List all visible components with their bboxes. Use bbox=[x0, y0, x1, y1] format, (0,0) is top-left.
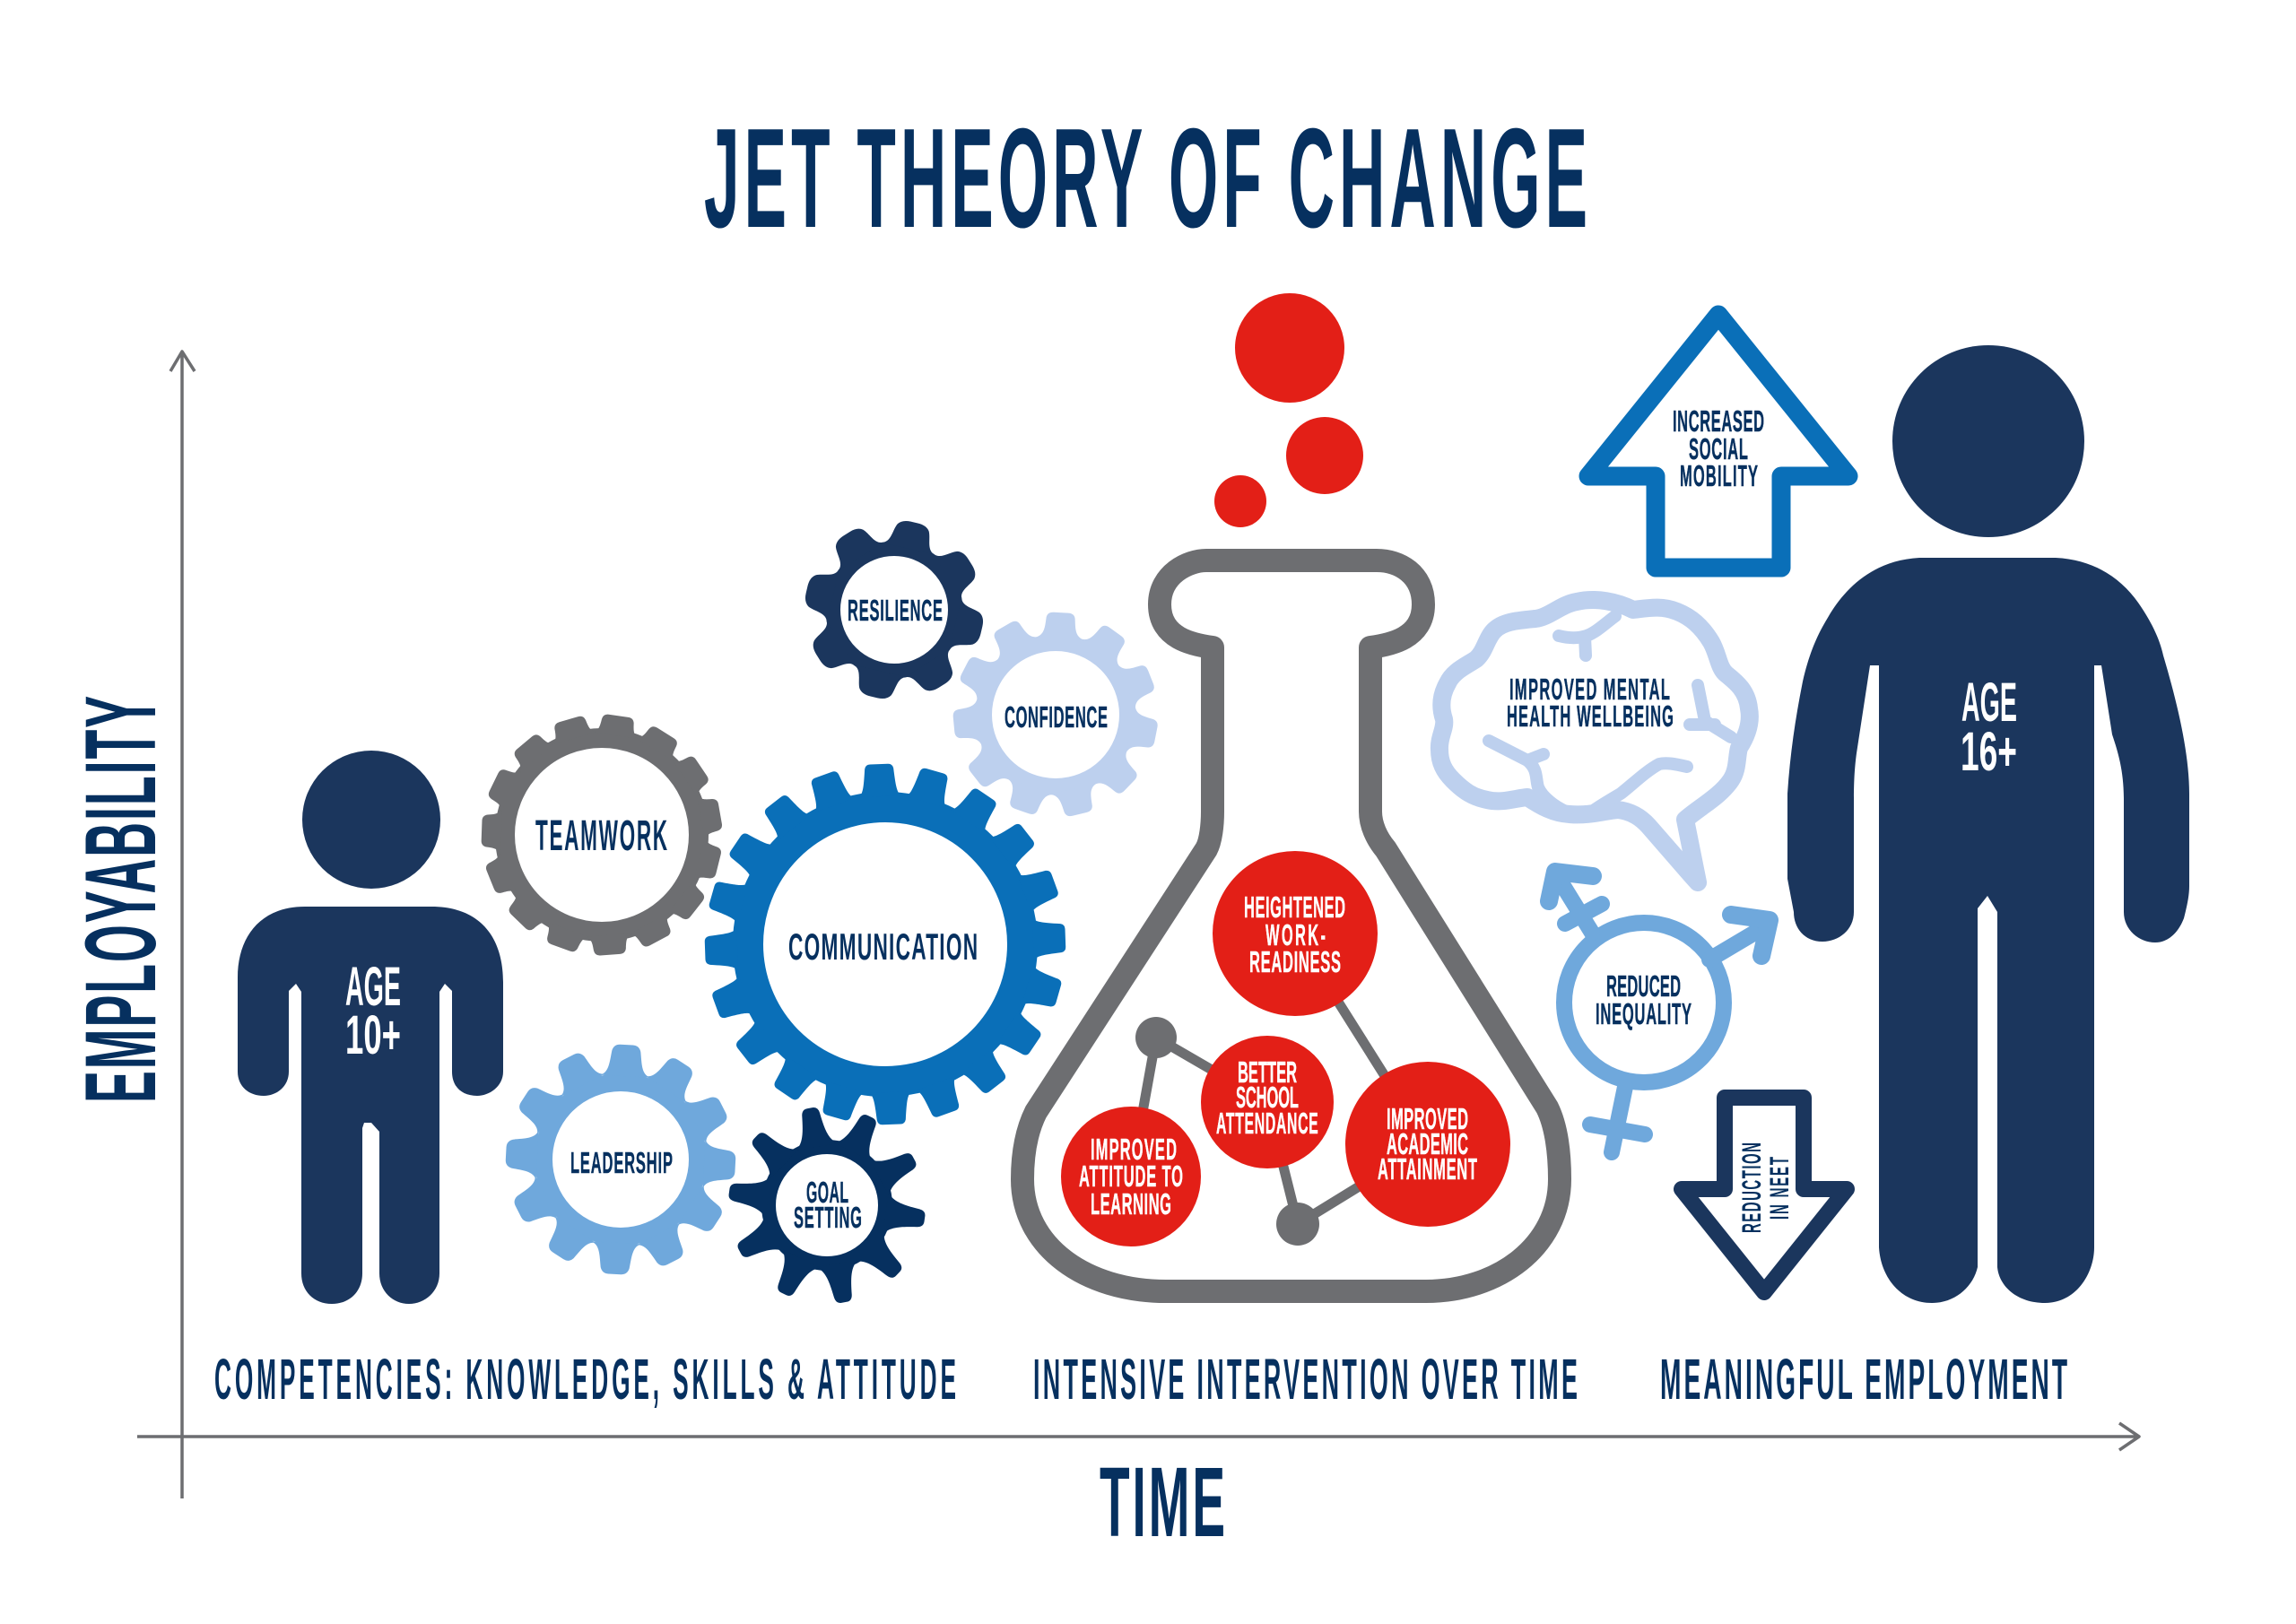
gear: goal setting: SETTING bbox=[794, 1201, 862, 1235]
circle: improved academic attainment: ACADEMIC bbox=[1387, 1127, 1468, 1161]
circle: better school attendance bbox=[1201, 1036, 1334, 1168]
circle: improved attitude to learning: LEARNING bbox=[1091, 1187, 1171, 1221]
gear: confidence: CONFIDENCE bbox=[1004, 700, 1108, 734]
circle: better school attendance: ATTENDANCE bbox=[1216, 1108, 1318, 1141]
figure: adult age 16+: 16+ bbox=[1961, 721, 2017, 782]
gender symbol: reduced inequality bbox=[1549, 872, 1770, 1152]
caption: employment: MEANINGFUL EMPLOYMENT bbox=[1660, 1348, 2067, 1411]
gear: communication bbox=[704, 763, 1066, 1125]
circle: heightened work-readiness: HEIGHTENED bbox=[1244, 890, 1345, 925]
circle: better school attendance: BETTER bbox=[1238, 1055, 1297, 1090]
circle: heightened work-readiness bbox=[1213, 851, 1378, 1016]
circle: improved attitude to learning: ATTITUDE TO bbox=[1079, 1159, 1183, 1194]
figure: child age 10+ bbox=[238, 751, 503, 1304]
gear: leadership: LEADERSHIP bbox=[570, 1146, 673, 1180]
title: JET THEORY OF CHANGE bbox=[704, 99, 1587, 257]
gear: resilience bbox=[801, 517, 987, 703]
gear: resilience: RESILIENCE bbox=[848, 594, 943, 628]
arrow: reduction in NEET: IN NEET bbox=[1766, 1157, 1796, 1220]
gear: goal setting bbox=[726, 1105, 927, 1306]
figure: adult age 16+: AGE bbox=[1961, 672, 2017, 733]
horizontal axis arrow bbox=[137, 1423, 2139, 1450]
circle: improved attitude to learning: IMPROVED bbox=[1091, 1133, 1177, 1167]
arrow: increased social mobility bbox=[1588, 315, 1848, 568]
arrow: increased social mobility: INCREASED bbox=[1673, 404, 1764, 439]
arrow: reduction in NEET bbox=[1682, 1098, 1847, 1292]
figure: child age 10+: AGE bbox=[345, 956, 401, 1017]
circle: improved academic attainment: ATTAINMENT bbox=[1378, 1152, 1477, 1186]
circle: improved academic attainment: IMPROVED bbox=[1387, 1102, 1468, 1136]
vertical axis arrow bbox=[170, 352, 195, 1498]
gender symbol: reduced inequality: INEQUALITY bbox=[1596, 997, 1692, 1031]
gender symbol: reduced inequality: REDUCED bbox=[1606, 969, 1681, 1003]
gear: goal setting: GOAL bbox=[806, 1177, 848, 1210]
caption: intervention: INTENSIVE INTERVENTION OVER TIME bbox=[1033, 1349, 1578, 1411]
gear: teamwork bbox=[481, 713, 724, 956]
bubbles above flask bbox=[1214, 293, 1363, 527]
figure: child age 10+: 10+ bbox=[345, 1004, 401, 1065]
circle: better school attendance: SCHOOL bbox=[1236, 1081, 1299, 1115]
arrow: reduction in NEET: REDUCTION bbox=[1738, 1142, 1768, 1233]
arrow: increased social mobility: SOCIAL bbox=[1689, 432, 1748, 466]
molecule connectors and nodes bbox=[1131, 934, 1428, 1246]
y axis label: employability: EMPLOYABILITY bbox=[64, 696, 177, 1103]
x axis label: time: TIME bbox=[1100, 1447, 1225, 1558]
brain: improved mental health wellbeing bbox=[1439, 600, 1750, 882]
gear: teamwork: TEAMWORK bbox=[535, 811, 667, 859]
circle: heightened work-readiness: WORK- bbox=[1265, 918, 1326, 952]
circle: heightened work-readiness: READINESS bbox=[1249, 945, 1341, 979]
arrow: increased social mobility: MOBILITY bbox=[1680, 459, 1758, 493]
gear: confidence bbox=[952, 612, 1161, 820]
circle: improved academic attainment bbox=[1345, 1062, 1510, 1227]
caption: competencies: COMPETENCIES: KNOWLEDGE, SKILLS & ATTITUDE bbox=[214, 1349, 956, 1411]
figure: adult age 16+ bbox=[1787, 345, 2189, 1303]
gear: communication: COMMUNICATION bbox=[788, 926, 978, 968]
brain: improved mental health wellbeing: IMPROVED MENTAL bbox=[1509, 673, 1670, 707]
circle: improved attitude to learning bbox=[1061, 1107, 1201, 1246]
flask outline bbox=[1022, 560, 1560, 1291]
gear: leadership bbox=[505, 1044, 736, 1275]
brain: improved mental health wellbeing: HEALTH WELLBEING bbox=[1507, 699, 1674, 734]
